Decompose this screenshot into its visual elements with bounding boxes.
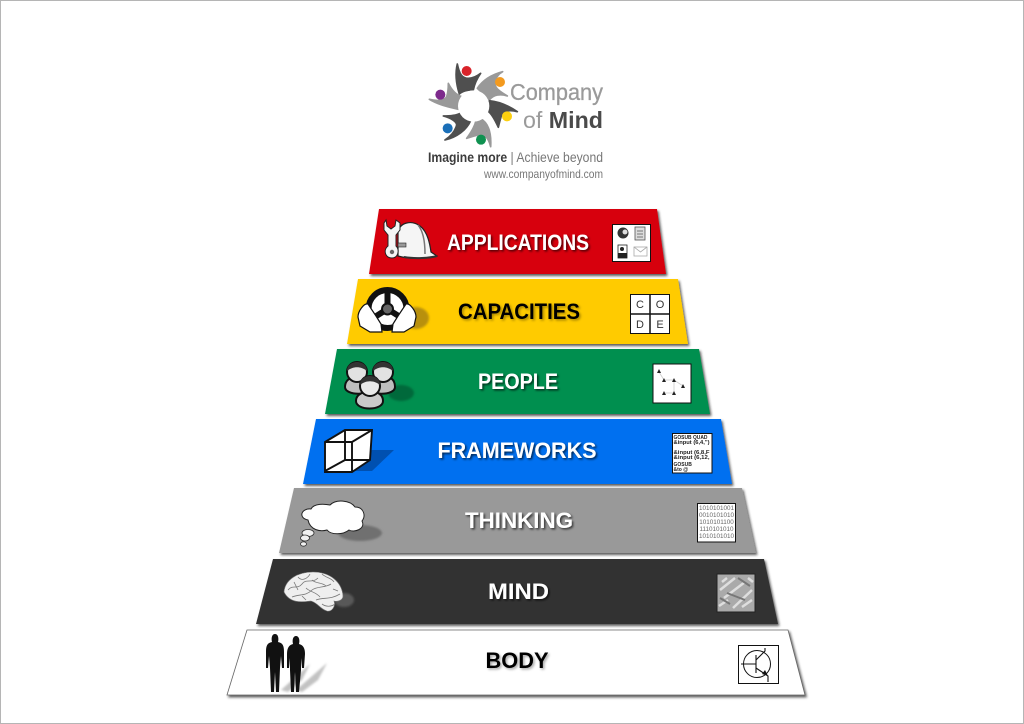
- icon: code box: C: [636, 299, 644, 311]
- icon: binary box: 1110101010: [699, 526, 734, 533]
- tier: frameworks: [303, 419, 732, 484]
- body label: BODY: [486, 648, 549, 673]
- icon: transistor box: [738, 646, 778, 684]
- tagline: Imagine more | Achieve beyond: [428, 150, 603, 165]
- icon: three people: [345, 362, 414, 408]
- icon: thought cloud: [300, 501, 382, 546]
- capacities label: CAPACITIES: [458, 299, 580, 324]
- icon: circuit board box: [717, 574, 755, 612]
- icon: network box: [653, 364, 691, 403]
- icon: code box: O: [656, 299, 665, 311]
- applications label: APPLICATIONS: [447, 230, 589, 255]
- icon: code box: D: [636, 319, 644, 331]
- people label: PEOPLE: [478, 369, 558, 394]
- website: www.companyofmind.com: [483, 167, 603, 181]
- capacities band: [347, 279, 688, 344]
- icon: binary box: 1010101001: [699, 505, 735, 512]
- icon: brain: [284, 572, 354, 611]
- logo wordmark: Company: [510, 79, 603, 105]
- icon: code listing box: GOSUB: [674, 462, 692, 468]
- icon: hands on steering wheel: [358, 288, 429, 332]
- icon: code listing box: &input (6,12,: [674, 455, 710, 461]
- people band: [325, 349, 710, 414]
- logo wordmark second line: of Mind: [523, 107, 603, 133]
- logo: [428, 64, 603, 181]
- mind label: MIND: [488, 579, 549, 604]
- icon: code box: [630, 294, 670, 334]
- icon: code listing box: GOSUB QUAD: [674, 435, 708, 441]
- icon: code listing box: &input (6,4,"): [674, 440, 710, 446]
- frameworks band: [303, 419, 732, 484]
- tier: thinking: [279, 488, 756, 553]
- mind band: [256, 559, 778, 624]
- icon: code listing box: [672, 434, 712, 473]
- thinking label: THINKING: [465, 508, 573, 533]
- frameworks label: FRAMEWORKS: [438, 438, 596, 463]
- icon: binary box: 0010101010: [699, 512, 735, 519]
- tier: applications: [369, 209, 666, 274]
- tier: people: [325, 349, 710, 414]
- logo emblem: [429, 64, 517, 147]
- icon: binary box: [698, 504, 736, 542]
- body band: [227, 630, 805, 695]
- icon: binary box: 1010101100: [699, 519, 734, 526]
- icon: code listing box: &to @: [674, 467, 688, 473]
- icon: documents box: [612, 224, 650, 262]
- applications band: [369, 209, 666, 274]
- thinking band: [279, 488, 756, 553]
- icon: code listing box: &input (6,8,F: [674, 450, 710, 456]
- tier: capacities: [347, 279, 688, 344]
- icon: helmet and wrench: [384, 220, 437, 258]
- icon: binary box: 1010101010: [699, 533, 735, 540]
- tier: mind: [256, 559, 778, 624]
- icon: wireframe cube: [325, 430, 394, 472]
- icon: two human silhouettes: [266, 634, 327, 692]
- icon: code box: E: [656, 319, 664, 331]
- tier: body: [227, 630, 805, 695]
